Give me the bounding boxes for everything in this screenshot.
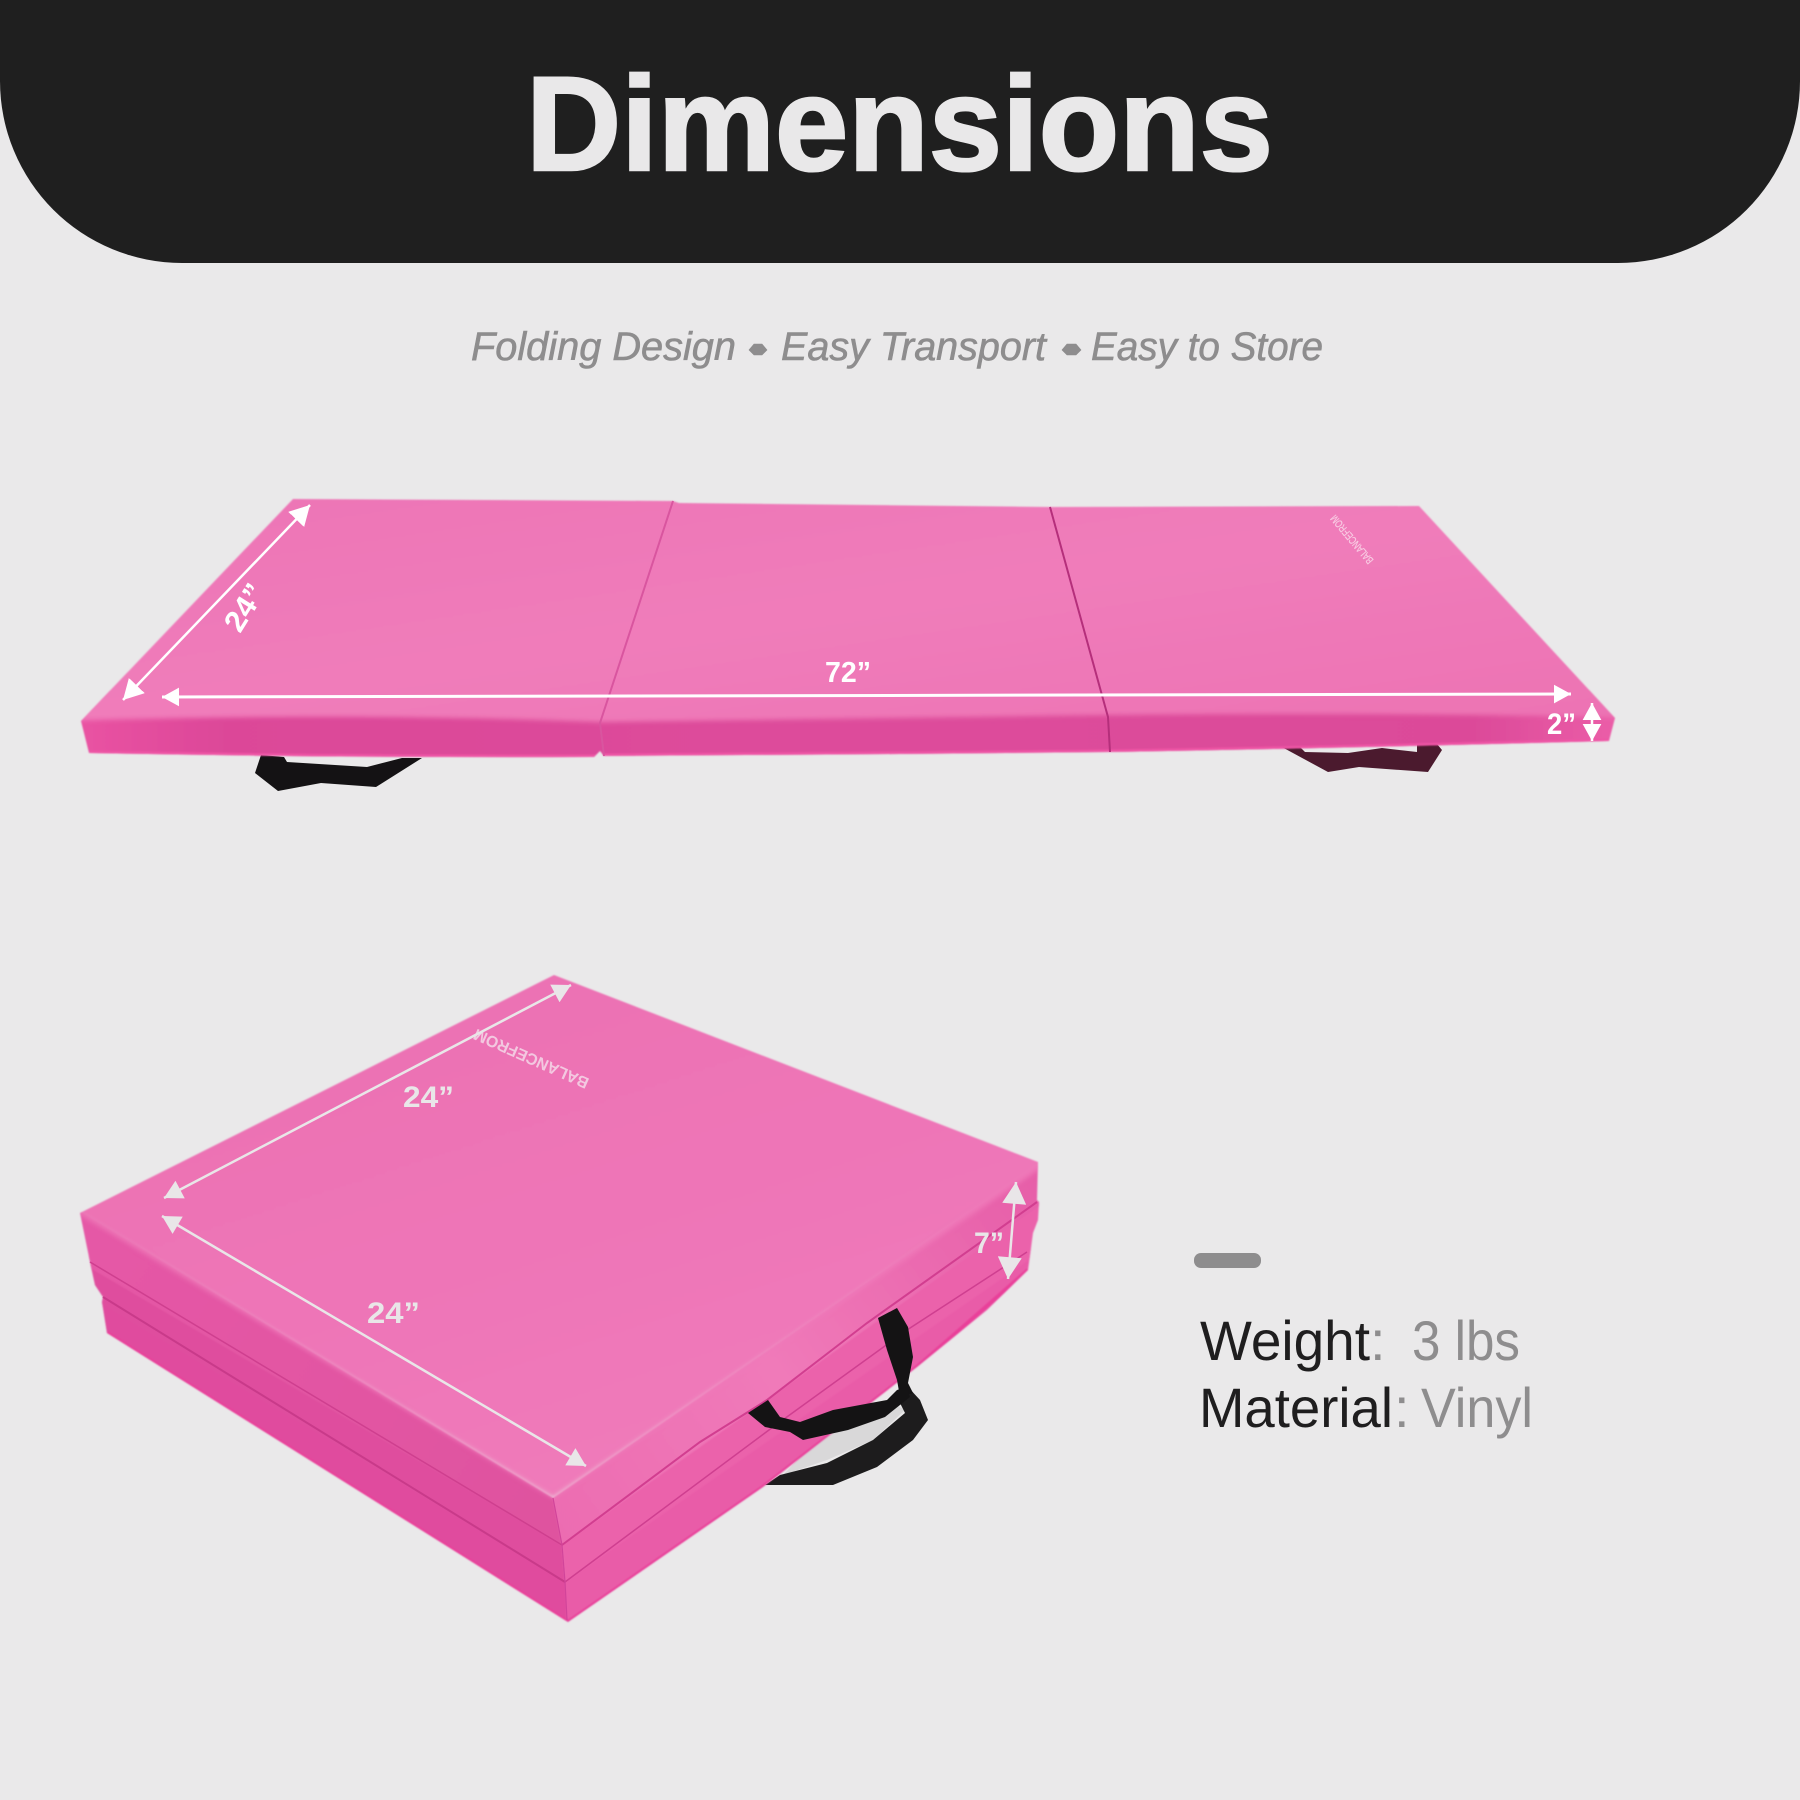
label: upper 24 inch: 24” (403, 1081, 454, 1114)
accent pill (1194, 1253, 1261, 1268)
label: 2 inch thickness: 2” (1547, 708, 1576, 741)
brand mark: BALANCEFROM (471, 1025, 592, 1091)
handle: right strap (1280, 744, 1442, 772)
weight line: Weight (1200, 1309, 1370, 1372)
handle: upper strap (878, 1308, 913, 1397)
subtitle: feature list: Easy to Store (1091, 325, 1323, 369)
fold seam one (600, 501, 673, 756)
layer seam right one (562, 1202, 1037, 1545)
handle: outer loop (765, 1387, 928, 1485)
title: Dimensions (526, 50, 1273, 199)
material line: Vinyl (1421, 1376, 1533, 1439)
weight line: 3 lbs (1412, 1309, 1520, 1372)
layer one left face (70, 1205, 562, 1545)
weight line: : (1370, 1309, 1386, 1372)
mat bottom hem (89, 740, 1609, 756)
folded mat (60, 965, 1050, 1640)
material line: : (1394, 1376, 1410, 1439)
arrow: upper 24 inch (164, 985, 571, 1198)
label: 7 inch height: 7” (974, 1227, 1004, 1260)
layer seam left one (90, 1262, 562, 1545)
bottom hem (107, 1270, 1028, 1622)
layer three left face (90, 1295, 567, 1630)
fold seam two (1050, 507, 1110, 752)
mat body (60, 490, 1640, 770)
material line (1199, 1376, 1533, 1439)
handle: left strap (255, 755, 422, 791)
corner edge (553, 1498, 567, 1620)
layer one right face (553, 1160, 1045, 1545)
layer two right face (562, 1202, 1040, 1582)
subtitle: feature list: Folding Design (471, 325, 736, 369)
handle: grip strap (748, 1387, 910, 1440)
handle: inner white lining (783, 1400, 905, 1475)
layer seam left two (103, 1297, 565, 1582)
subtitle: feature list: Easy Transport (781, 325, 1048, 369)
label: 24 inch width: 24” (218, 578, 272, 638)
mat top surface (60, 490, 1640, 722)
layer seam right two (565, 1252, 1027, 1582)
header banner (0, 0, 1800, 263)
label: lower 24 inch: 24” (367, 1297, 420, 1330)
label: 72 inch length: 72” (825, 657, 871, 689)
arrow: 24 inch width (123, 505, 310, 700)
spec block: weight and material (1194, 1253, 1533, 1439)
unfolded mat (60, 490, 1640, 791)
layer three (104, 1258, 1030, 1620)
layer two left face (80, 1258, 565, 1582)
arrow: 7 inch height (1008, 1182, 1016, 1279)
arrow: 2 inch thickness (1591, 703, 1593, 741)
arrow: lower 24 inch (162, 1216, 586, 1466)
mat body (60, 965, 1050, 1640)
subtitle: feature list (471, 325, 1323, 369)
weight line (1200, 1309, 1520, 1372)
brand mark: BALANCEFROM (1329, 512, 1376, 566)
material line: Material (1199, 1376, 1393, 1439)
mat front side (80, 700, 1616, 758)
mat top surface (60, 965, 1050, 1498)
arrow: 72 inch length (162, 694, 1571, 697)
